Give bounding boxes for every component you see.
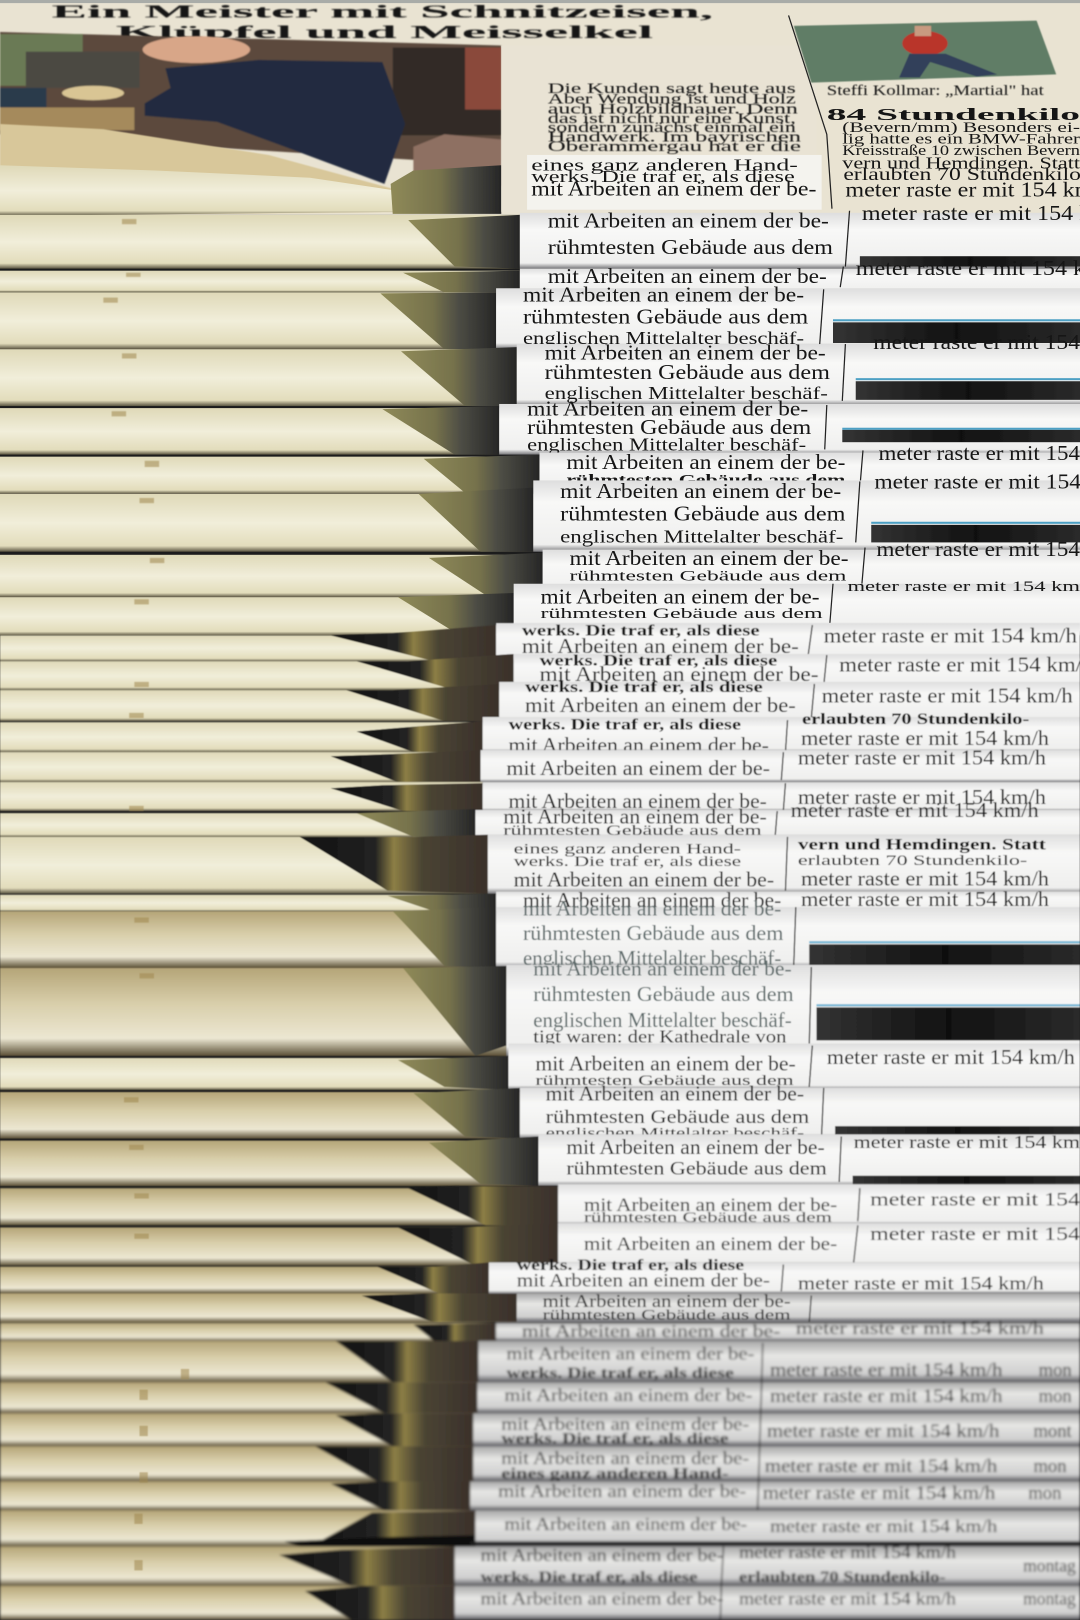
fold 10: mit Arbeiten an einem der be- (541, 586, 820, 608)
fold 23: englischen Mittelalter beschäf- (546, 1126, 804, 1142)
fold 15: mit Arbeiten an einem der be- (506, 758, 770, 780)
fold 37 (0, 1586, 1080, 1620)
fold 32: mit Arbeiten an einem der be- (501, 1414, 749, 1434)
fold 35 (0, 1510, 1080, 1550)
side article: 84 Stundenkilometer: vern und Hemdingen. Statt (842, 153, 1080, 172)
main article column (501, 45, 822, 212)
main article column: mit Arbeiten an einem der be- (531, 178, 817, 200)
fold 18: werks. Die traf er, als diese (514, 854, 741, 870)
main article column: Handwerk. Im bayrischen (548, 130, 801, 146)
fold 13 (0, 679, 1080, 721)
fold 34: mit Arbeiten an einem der be- (498, 1481, 746, 1501)
fold 12 (0, 652, 1080, 690)
fold 33: mit Arbeiten an einem der be- (501, 1448, 749, 1468)
fold 16 (0, 782, 1080, 813)
fold 14: werks. Die traf er, als diese (508, 716, 741, 733)
fold 25 (0, 1184, 1080, 1226)
main photograph: carver at work (0, 32, 501, 186)
main article column: werks. Die traf er, als diese (531, 167, 795, 186)
fold 27 (0, 1257, 1080, 1294)
fold 5: mit Arbeiten an einem der be- (545, 343, 826, 365)
fold 2: rühmtesten Gebäude aus dem (548, 237, 833, 259)
fold 8: englischen Mittelalter beschäf- (560, 526, 844, 546)
fold 18: meter raste er mit 154 km/h (801, 868, 1050, 890)
fold 29 (0, 1318, 1080, 1341)
fold 18: erlaubten 70 Stundenkilo- (798, 853, 1028, 869)
folded cream edge (0, 124, 398, 216)
fold 10 (0, 579, 1080, 635)
fold 2: meter raste er mit 154 km (862, 203, 1080, 225)
main article column: das ist nicht nur eine Kunst, (548, 111, 796, 127)
fold 33: meter raste er mit 154 km/h (765, 1456, 998, 1477)
fold 18: vern und Hemdingen. Statt (798, 836, 1047, 853)
fold 6 (0, 398, 1080, 455)
fold 6: mit Arbeiten an einem der be- (527, 398, 808, 420)
fold 24: rühmtesten Gebäude aus dem (566, 1159, 827, 1180)
fold 22: mit Arbeiten an einem der be- (535, 1053, 796, 1075)
fold 9: meter raste er mit 154 (876, 539, 1080, 561)
fold 29: meter raste er mit 154 km/h (796, 1318, 1044, 1338)
main article column: auch Holzbildhauer. Denn (548, 102, 798, 118)
fold 20 (0, 898, 1080, 970)
fold 15: meter raste er mit 154 km/h (798, 748, 1047, 770)
blurred headline (52, 2, 713, 42)
fold 21: tigt waren: der Kathedrale von (533, 1026, 787, 1046)
fold 21: mit Arbeiten an einem der be- (533, 958, 792, 980)
fold 31: meter raste er mit 154 km/h (770, 1386, 1003, 1407)
fold 7 (0, 443, 1080, 494)
fold 28: rühmtesten Gebäude aus dem (543, 1307, 792, 1323)
fold 11: mit Arbeiten an einem der be- (522, 636, 799, 658)
fold 20: rühmtesten Gebäude aus dem (523, 923, 783, 945)
fold 35: meter raste er mit 154 km/h (770, 1516, 998, 1536)
side article: 84 Stundenkilometer: lig hatte es ein BMW-Fahrer (842, 132, 1080, 148)
fold 24: mit Arbeiten an einem der be- (566, 1137, 825, 1159)
fold 36: werks. Die traf er, als diese (481, 1569, 698, 1586)
fold 5: englischen Mittelalter beschäf- (545, 383, 828, 403)
fold 27: meter raste er mit 154 km/h (798, 1273, 1045, 1294)
fold 30: meter raste er mit 154 km/h (770, 1360, 1003, 1381)
main article column: sondern zunächst einmal ein (548, 120, 796, 136)
fold 8: meter raste er mit 154 (874, 472, 1080, 494)
middle folds: slight blur (0, 622, 1080, 1186)
fold 37: meter raste er mit 154 km/h (739, 1589, 956, 1609)
fold 15 (0, 748, 1080, 782)
fold 4: rühmtesten Gebäude aus dem (523, 306, 808, 328)
fold 27: werks. Die traf er, als diese (517, 1257, 744, 1274)
fold 18: eines ganz anderen Hand- (514, 841, 741, 857)
fold 25: meter raste er mit 154 (870, 1190, 1080, 1211)
side article: 84 Stundenkilometer: (Bevern/mm) Besonders ei- (842, 120, 1080, 136)
upper folds: sharp text (0, 203, 1080, 635)
fold 8: mit Arbeiten an einem der be- (560, 481, 841, 503)
fold 36: mit Arbeiten an einem der be- (481, 1545, 724, 1565)
fold 21: englischen Mittelalter beschäf- (533, 1010, 792, 1032)
fold 21: rühmtesten Gebäude aus dem (533, 984, 794, 1006)
fold 37: montag (1023, 1589, 1076, 1609)
fold 5 (0, 332, 1080, 406)
fold 35: mit Arbeiten an einem der be- (504, 1514, 747, 1534)
fold 23: mit Arbeiten an einem der be- (546, 1083, 804, 1105)
side article: 84 Stundenkilometer: 84 Stundenkilo (827, 105, 1080, 124)
fold 17: meter raste er mit 154 km/h (791, 800, 1039, 822)
fold 30: werks. Die traf er, als diese (506, 1365, 734, 1382)
fold 26: mit Arbeiten an einem der be- (584, 1234, 837, 1255)
side article: 84 Stundenkilometer: erlaubten 70 Stundenkilo (843, 164, 1080, 184)
fold 20: mit Arbeiten an einem der be- (523, 898, 781, 920)
blurred headline: Klüpfel und Meisselkel (116, 22, 654, 42)
fold 23 (0, 1083, 1080, 1142)
fold 34: meter raste er mit 154 km/h (763, 1483, 996, 1504)
fold 14: mit Arbeiten an einem der be- (508, 735, 769, 757)
fold 6: rühmtesten Gebäude aus dem (527, 417, 811, 439)
fold 13: mit Arbeiten an einem der be- (525, 695, 796, 717)
fold 36: meter raste er mit 154 km/h (739, 1542, 956, 1562)
fold 22: meter raste er mit 154 km/h (827, 1047, 1076, 1069)
stain marks along the folded edge (103, 219, 189, 1570)
fold 9: rühmtesten Gebäude aus dem (569, 569, 848, 585)
fold 9: mit Arbeiten an einem der be- (569, 548, 849, 570)
fold 36: erlaubten 70 Stundenkilo- (739, 1569, 946, 1586)
fold 18: mit Arbeiten an einem der be- (514, 869, 774, 891)
fold 13: werks. Die traf er, als diese (525, 679, 763, 696)
fold 31 (0, 1382, 1080, 1413)
fold 33: mon (1033, 1456, 1067, 1477)
fold 5: rühmtesten Gebäude aus dem (545, 362, 830, 384)
fold 22: rühmtesten Gebäude aus dem (535, 1073, 795, 1089)
main article column: Aber Wendung ist und Holz (548, 91, 797, 107)
fold 26: meter raste er mit 154 (870, 1224, 1080, 1245)
fold 12: werks. Die traf er, als diese (539, 652, 777, 669)
fold 16: mit Arbeiten an einem der be- (508, 791, 767, 813)
fold 25: rühmtesten Gebäude aus dem (584, 1210, 833, 1226)
fold 32 (0, 1413, 1080, 1447)
fold 3 (0, 258, 1080, 292)
fold 36: montag (1023, 1555, 1076, 1575)
fold 6: englischen Mittelalter beschäf- (527, 434, 806, 454)
lower folds: stronger blur (0, 1184, 1080, 1323)
fold 33: eines ganz anderen Hand- (501, 1465, 729, 1482)
fold 29: mit Arbeiten an einem der be- (522, 1321, 780, 1341)
fold 34: mon (1028, 1483, 1062, 1504)
fold 7: meter raste er mit 154 (878, 443, 1080, 465)
fold 26 (0, 1223, 1080, 1266)
fold 11 (0, 622, 1080, 661)
fold 14: meter raste er mit 154 km/h (801, 728, 1050, 750)
fold 3: meter raste er mit 154 km (856, 258, 1080, 280)
fold 3: mit Arbeiten an einem der be- (548, 266, 827, 288)
fold 4 (0, 285, 1080, 349)
fold 16: meter raste er mit 154 km/h (798, 787, 1047, 809)
main article column: eines ganz anderen Hand- (531, 155, 798, 174)
fold 34 (0, 1481, 1080, 1510)
fold 32: mont (1033, 1421, 1073, 1442)
fold 4: englischen Mittelalter beschäf- (523, 328, 804, 348)
fold 22 (0, 1043, 1080, 1090)
fold 2: mit Arbeiten an einem der be- (548, 210, 829, 232)
fold 19: meter raste er mit 154 km/h (801, 889, 1050, 911)
fold 33 (0, 1446, 1080, 1482)
fold 24 (0, 1132, 1080, 1186)
fold 14 (0, 711, 1080, 757)
main article column: Die Kunden sagt heute aus (548, 81, 796, 97)
fold 11: meter raste er mit 154 km/h (824, 626, 1078, 648)
fold 12: meter raste er mit 154 km/ (839, 655, 1080, 677)
fold 11: werks. Die traf er, als diese (522, 622, 760, 639)
blurred headline: Ein Meister mit Schnitzeisen, (52, 2, 713, 22)
fold 12: mit Arbeiten an einem der be- (539, 664, 819, 686)
fold 31: mon (1039, 1386, 1072, 1407)
fold 32: werks. Die traf er, als diese (501, 1430, 729, 1447)
fold 8: rühmtesten Gebäude aus dem (560, 504, 845, 526)
fold 10: meter raste er mit 154 km (847, 579, 1080, 595)
fold 17 (0, 800, 1080, 839)
bottom folds: heavily out of focus (0, 1318, 1080, 1620)
fold 2 (0, 203, 1080, 269)
fold 36 (0, 1542, 1080, 1586)
fold 30 (0, 1341, 1080, 1382)
fold 24: meter raste er mit 154 km (854, 1132, 1080, 1152)
fold 31: mit Arbeiten an einem der be- (504, 1385, 753, 1405)
main article column: Oberammergau hat er die (548, 139, 801, 155)
fold 9 (0, 539, 1080, 597)
side article: 84 Stundenkilometer: Kreisstraße 10 zwischen Bevern (842, 143, 1080, 159)
fold 37: mit Arbeiten an einem der be- (481, 1589, 724, 1609)
fold 7: mit Arbeiten an einem der be- (566, 452, 846, 474)
side article: 84 Stundenkilometer (827, 83, 1080, 201)
fold 32: meter raste er mit 154 km/h (767, 1421, 1000, 1442)
fold 13: meter raste er mit 154 km/h (822, 686, 1074, 708)
fold 14: erlaubten 70 Stundenkilo- (802, 711, 1029, 728)
top newspaper front page (0, 0, 1080, 216)
fold 21 (0, 958, 1080, 1056)
fold 17: mit Arbeiten an einem der be- (503, 806, 767, 828)
fold 19 (0, 889, 1080, 912)
fold 17: rühmtesten Gebäude aus dem (503, 823, 763, 839)
side article: 84 Stundenkilometer: meter raste er mit 154 km (845, 179, 1080, 201)
fold 5: meter raste er mit 154 (873, 332, 1080, 354)
fold tip (391, 165, 501, 214)
fold 18 (0, 835, 1080, 894)
fold 8 (0, 472, 1080, 552)
column rule (789, 15, 832, 209)
fold 30: mit Arbeiten an einem der be- (506, 1344, 755, 1364)
fold 25: mit Arbeiten an einem der be- (584, 1195, 837, 1216)
small photograph: man in red jacket (794, 21, 1056, 83)
fold 7: rühmtesten Gebäude aus dem (566, 473, 845, 489)
fold 20: englischen Mittelalter beschäf- (523, 948, 781, 970)
fold 10: rühmtesten Gebäude aus dem (541, 606, 824, 622)
side article: 84 Stundenkilometer: Steffi Kollmar: „Martial" hat (827, 83, 1044, 99)
fold 28: mit Arbeiten an einem der be- (543, 1291, 791, 1311)
fold 30: mon (1039, 1360, 1072, 1381)
fold 23: rühmtesten Gebäude aus dem (546, 1107, 810, 1128)
fold 19: mit Arbeiten an einem der be- (523, 890, 781, 912)
fold 27: mit Arbeiten an einem der be- (517, 1270, 770, 1291)
fold 4: mit Arbeiten an einem der be- (523, 285, 804, 307)
fold 28 (0, 1291, 1080, 1323)
